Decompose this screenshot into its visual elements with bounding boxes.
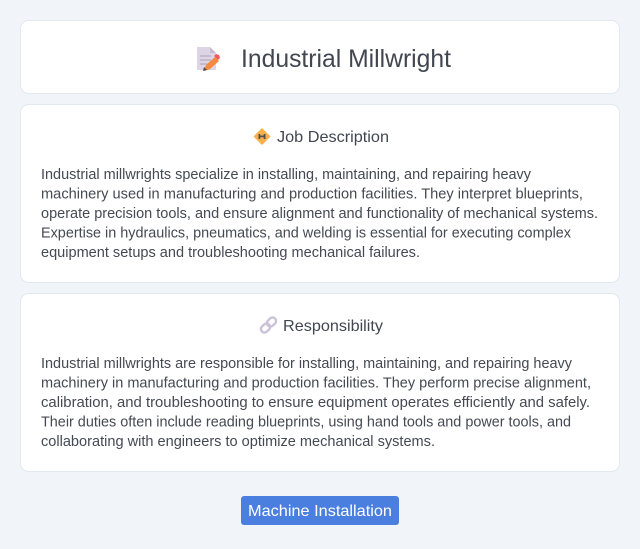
text block: responsibility: calibration, and troubleshooting to ensure equipment operates efficiently and safely.: [41, 395, 590, 411]
heading: job description: Job Description: [277, 129, 389, 146]
text block: responsibility: Industrial millwrights are responsible for installing, maintaining, and repairing heavy: [41, 356, 573, 372]
text block: job description: machinery used in manufacturing and production facilities. They interpret blueprints,: [41, 186, 583, 202]
text block: job description: operate precision tools, and ensure alignment and functionality of mechanical systems.: [41, 206, 598, 222]
text block: responsibility: machinery in manufacturing and production facilities. They perform precise alignment,: [41, 376, 591, 392]
title: Industrial Millwright: [241, 45, 451, 73]
text block: job description: equipment setups and troubleshooting mechanical failures.: [41, 245, 420, 261]
text block: job description: Industrial millwrights specialize in installing, maintaining, and repairing heavy: [41, 167, 532, 183]
heading: responsibility: Responsibility: [283, 318, 383, 335]
icon: document with pencil: [197, 47, 220, 71]
icon: construction diamond sign: [254, 129, 270, 144]
text block: job description: Expertise in hydraulics, pneumatics, and welding is essential for executing complex: [41, 226, 572, 242]
button: machine installation: [241, 496, 399, 525]
text block: responsibility: [41, 356, 591, 450]
button: machine installation: Machine Installation: [248, 503, 392, 520]
panel: title card: [20, 20, 620, 94]
text block: job description: [41, 167, 598, 261]
icon: chain link: [259, 316, 278, 334]
text block: responsibility: collaborating with engineers to optimize mechanical systems.: [41, 434, 435, 450]
text block: responsibility: Their duties often include reading blueprints, using hand tools and power tools, and: [41, 414, 571, 430]
panel: responsibility: [20, 294, 620, 472]
panel: job description: [20, 104, 620, 282]
